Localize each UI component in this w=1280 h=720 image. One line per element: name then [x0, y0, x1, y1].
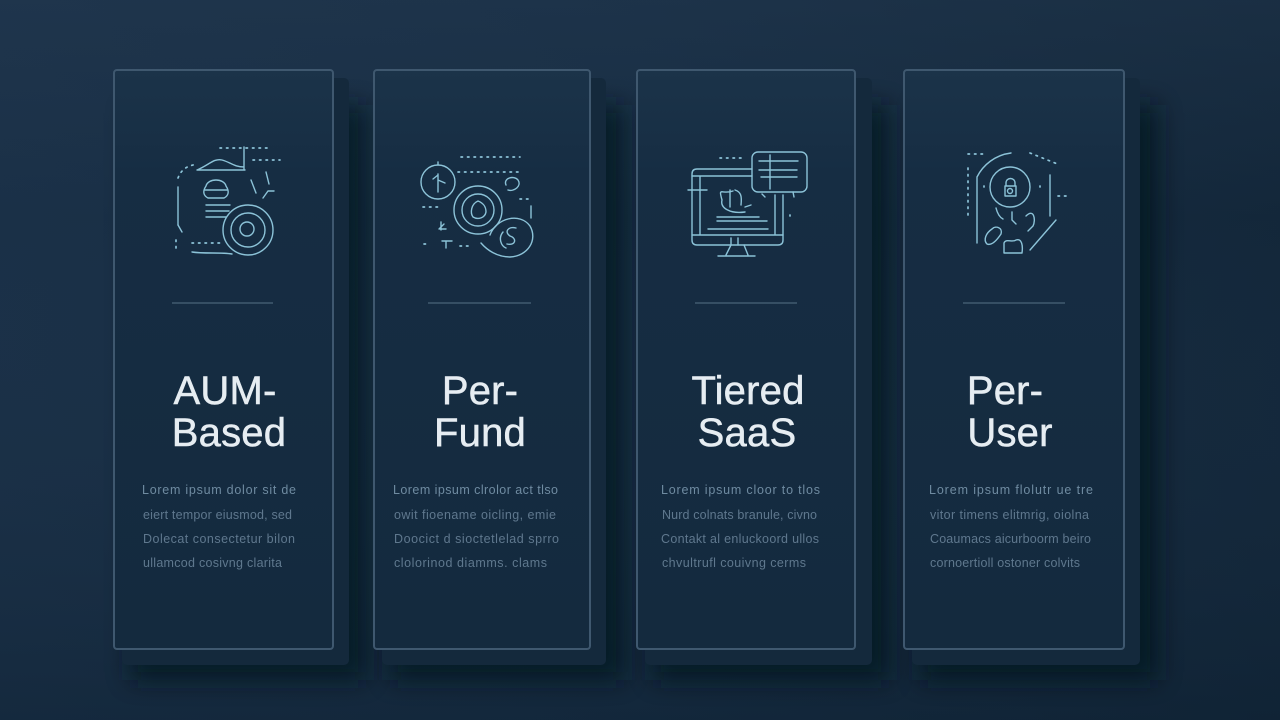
- text block: [142, 483, 296, 570]
- heading: Fund: [434, 411, 526, 455]
- text block: vitor timens elitmrig, oiolna: [930, 508, 1089, 522]
- heading: [172, 369, 286, 455]
- heading: [967, 369, 1053, 455]
- text block: Lorem ipsum clrolor act tlso: [393, 483, 558, 497]
- divider: [172, 302, 273, 304]
- panel: Per-Fund: [374, 70, 624, 680]
- icon: coins and dollar: [421, 157, 533, 257]
- heading: [434, 369, 526, 455]
- text block: Lorem ipsum flolutr ue tre: [929, 483, 1093, 497]
- text block: Doocict d sioctetlelad sprro: [394, 532, 559, 546]
- text block: Lorem ipsum cloor to tlos: [661, 483, 820, 497]
- icon: user with lock: [968, 153, 1066, 253]
- text block: Nurd colnats branule, civno: [662, 508, 817, 522]
- text block: Dolecat consectetur bilon: [143, 532, 295, 546]
- heading: Per-: [442, 369, 518, 413]
- icon: AUM coin and documents: [176, 147, 280, 255]
- panel: Tiered SaaS: [637, 70, 889, 680]
- text block: Coaumacs aicurboorm beiro: [930, 532, 1091, 546]
- divider: [963, 302, 1065, 304]
- heading: Per-: [967, 369, 1043, 413]
- panel: AUM-Based: [114, 70, 366, 680]
- heading: Based: [172, 411, 286, 455]
- icon: monitor with chat window: [688, 152, 807, 256]
- text block: Lorem ipsum dolor sit de: [142, 483, 296, 497]
- heading: [691, 369, 805, 455]
- text block: chvultrufl couivng cerms: [662, 556, 806, 570]
- text block: cornoertioll ostoner colvits: [930, 556, 1080, 570]
- panel: Per-User: [904, 70, 1158, 680]
- heading: Tiered: [691, 369, 805, 413]
- heading: SaaS: [698, 411, 796, 455]
- heading: User: [967, 411, 1053, 455]
- text block: [661, 483, 820, 570]
- text block: ullamcod cosivng clarita: [143, 556, 282, 570]
- text block: owit fioename oicling, emie: [394, 508, 556, 522]
- text block: eiert tempor eiusmod, sed: [143, 508, 292, 522]
- divider: [428, 302, 531, 304]
- heading: AUM-: [173, 369, 277, 413]
- text block: Contakt al enluckoord ullos: [661, 532, 819, 546]
- text block: [929, 483, 1093, 570]
- text block: [393, 483, 559, 570]
- text block: clolorinod diamms. clams: [394, 556, 547, 570]
- divider: [695, 302, 797, 304]
